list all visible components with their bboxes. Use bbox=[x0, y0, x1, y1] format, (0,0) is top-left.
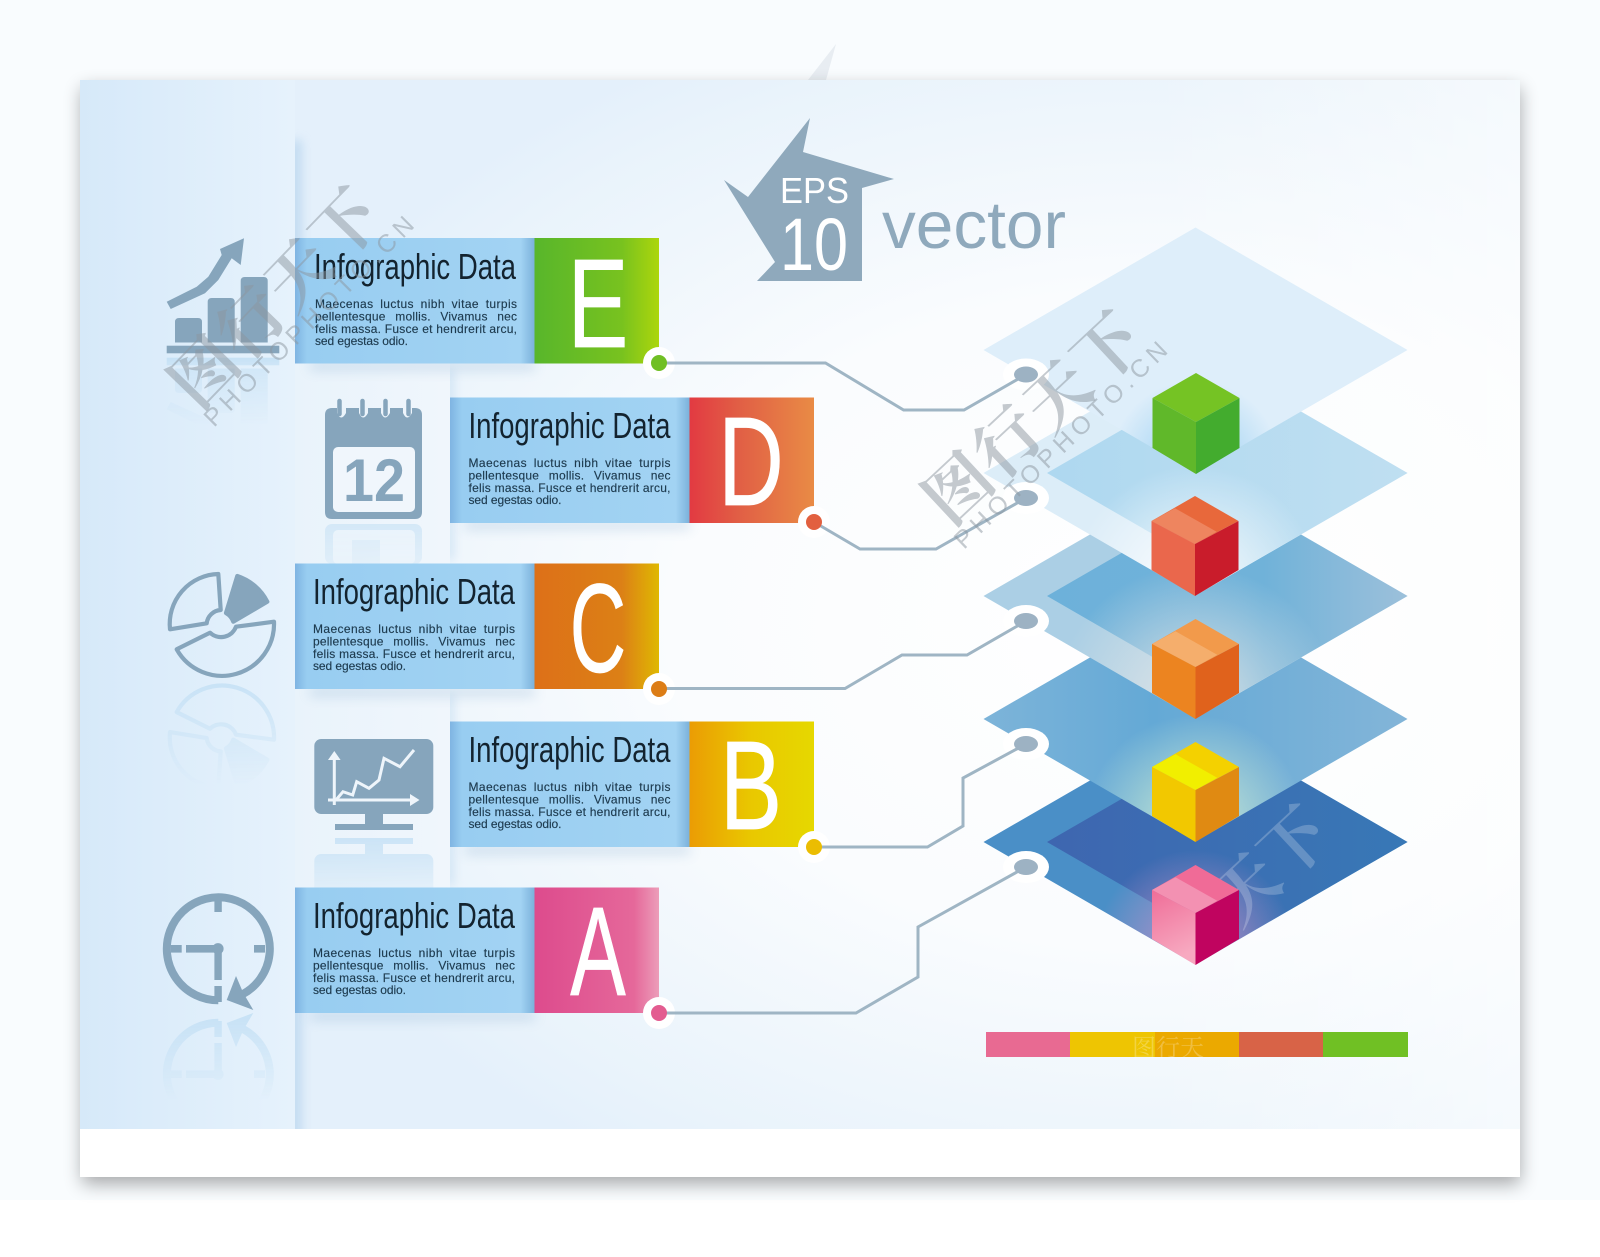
layer C (orange) bbox=[984, 474, 1408, 718]
blue label bar bbox=[450, 398, 690, 523]
body text: sed egestas odio. bbox=[468, 493, 562, 507]
body text: sed egestas odio. bbox=[468, 817, 562, 831]
colour legend bar bbox=[986, 1028, 1408, 1063]
body text: Maecenas luctus nibh vitae turpis bbox=[313, 946, 515, 960]
icon: calendar: 12 bbox=[343, 447, 405, 514]
column edge shade bbox=[295, 138, 305, 1129]
body text: sed egestas odio. bbox=[315, 334, 408, 348]
icon: calendar bbox=[325, 401, 422, 519]
watermark right: PHOTOPHOTO.CN bbox=[949, 336, 1173, 554]
body text: pellentesque mollis. Vivamus nec bbox=[468, 468, 670, 482]
layer B (yellow) bbox=[984, 596, 1408, 842]
cube orange bbox=[1152, 619, 1239, 719]
logo: EPS 10 vector bbox=[724, 118, 1066, 286]
letter tile bbox=[534, 564, 659, 689]
letter D: D bbox=[718, 393, 784, 533]
heading: Infographic Data bbox=[313, 895, 516, 936]
letter tile bbox=[534, 888, 659, 1013]
layered diamonds with cubes bbox=[984, 228, 1408, 965]
icon: clock with arrow bbox=[167, 897, 270, 1010]
second column between rows bbox=[295, 363, 450, 888]
letter tile bbox=[690, 398, 814, 523]
body text bbox=[315, 297, 517, 348]
vector word: vector bbox=[882, 188, 1066, 263]
body text: sed egestas odio. bbox=[313, 983, 406, 997]
body text: pellentesque mollis. Vivamus nec bbox=[315, 310, 517, 324]
letter tile bbox=[690, 722, 814, 847]
heading: Infographic Data bbox=[468, 405, 671, 446]
body text: Maecenas luctus nibh vitae turpis bbox=[315, 297, 517, 311]
body text: Maecenas luctus nibh vitae turpis bbox=[313, 622, 515, 636]
layer D (red) bbox=[984, 350, 1408, 596]
blue label bar bbox=[295, 888, 535, 1013]
blue label bar bbox=[295, 238, 535, 364]
body text: felis massa. Fusce et hendrerit arcu, bbox=[313, 647, 515, 661]
panel base bbox=[80, 80, 1520, 1177]
cube pink bbox=[1152, 865, 1239, 965]
body text: Maecenas luctus nibh vitae turpis bbox=[468, 780, 670, 794]
letter C: C bbox=[570, 559, 626, 700]
connector D bbox=[798, 482, 1049, 549]
body text bbox=[468, 456, 670, 507]
body text: sed egestas odio. bbox=[313, 659, 406, 673]
panel: row B bbox=[450, 716, 814, 856]
letter tile bbox=[534, 238, 659, 364]
left column bbox=[80, 80, 295, 1129]
body text: pellentesque mollis. Vivamus nec bbox=[313, 958, 515, 972]
body text bbox=[313, 946, 515, 997]
panel: row C bbox=[295, 559, 659, 700]
letter E: E bbox=[568, 235, 628, 375]
body text bbox=[313, 622, 515, 673]
panel blue background bbox=[80, 80, 1520, 1129]
faint arrow tip behind panel bbox=[808, 44, 836, 80]
logo arrow badge bbox=[724, 118, 894, 281]
top right lightening bbox=[1150, 80, 1520, 1129]
body text bbox=[468, 780, 670, 831]
panel: row E bbox=[295, 235, 659, 375]
connector C bbox=[643, 605, 1049, 705]
cube yellow bbox=[1152, 742, 1239, 842]
letter B: B bbox=[720, 716, 782, 856]
heading: Infographic Data bbox=[468, 729, 671, 770]
watermark right: 图行天下 bbox=[898, 288, 1161, 542]
connector A bbox=[643, 851, 1049, 1029]
cube red bbox=[1152, 496, 1238, 596]
letter A: A bbox=[570, 881, 626, 1022]
number 10: 10 bbox=[780, 203, 848, 286]
body text: Maecenas luctus nibh vitae turpis bbox=[468, 456, 670, 470]
connector E bbox=[643, 347, 1049, 410]
layer E (green) bbox=[984, 228, 1408, 472]
second column edge shade bbox=[444, 370, 454, 885]
body text: felis massa. Fusce et hendrerit arcu, bbox=[315, 322, 517, 336]
body text: pellentesque mollis. Vivamus nec bbox=[313, 634, 515, 648]
heading: Infographic Data bbox=[314, 246, 517, 287]
watermark left: 图行天下 bbox=[143, 164, 400, 425]
icon: growth bar chart bbox=[167, 238, 279, 353]
panel: row D bbox=[450, 393, 814, 533]
watermark left: PHOTOPHOTO.CN bbox=[198, 211, 420, 432]
cube green bbox=[1152, 373, 1240, 474]
watermark on bottom layer: 天下 bbox=[1186, 782, 1348, 942]
row shadows bbox=[310, 362, 690, 1020]
heading: Infographic Data bbox=[313, 571, 516, 612]
body text: felis massa. Fusce et hendrerit arcu, bbox=[468, 481, 670, 495]
panel: row A bbox=[295, 881, 659, 1022]
body text: pellentesque mollis. Vivamus nec bbox=[468, 792, 670, 806]
icon: monitor with line chart bbox=[314, 739, 433, 830]
layer A (pink) bbox=[984, 720, 1408, 964]
blue label bar bbox=[295, 564, 535, 689]
blue label bar bbox=[450, 722, 690, 847]
body text: felis massa. Fusce et hendrerit arcu, bbox=[313, 971, 515, 985]
colour legend bar: 图行天 bbox=[1132, 1028, 1204, 1063]
icon reflections bbox=[167, 358, 433, 1126]
connector B bbox=[798, 728, 1049, 863]
body text: felis massa. Fusce et hendrerit arcu, bbox=[468, 805, 670, 819]
icon: pie chart bbox=[170, 574, 274, 676]
EPS label: EPS bbox=[780, 170, 849, 211]
panel shadow bbox=[82, 88, 1520, 1184]
